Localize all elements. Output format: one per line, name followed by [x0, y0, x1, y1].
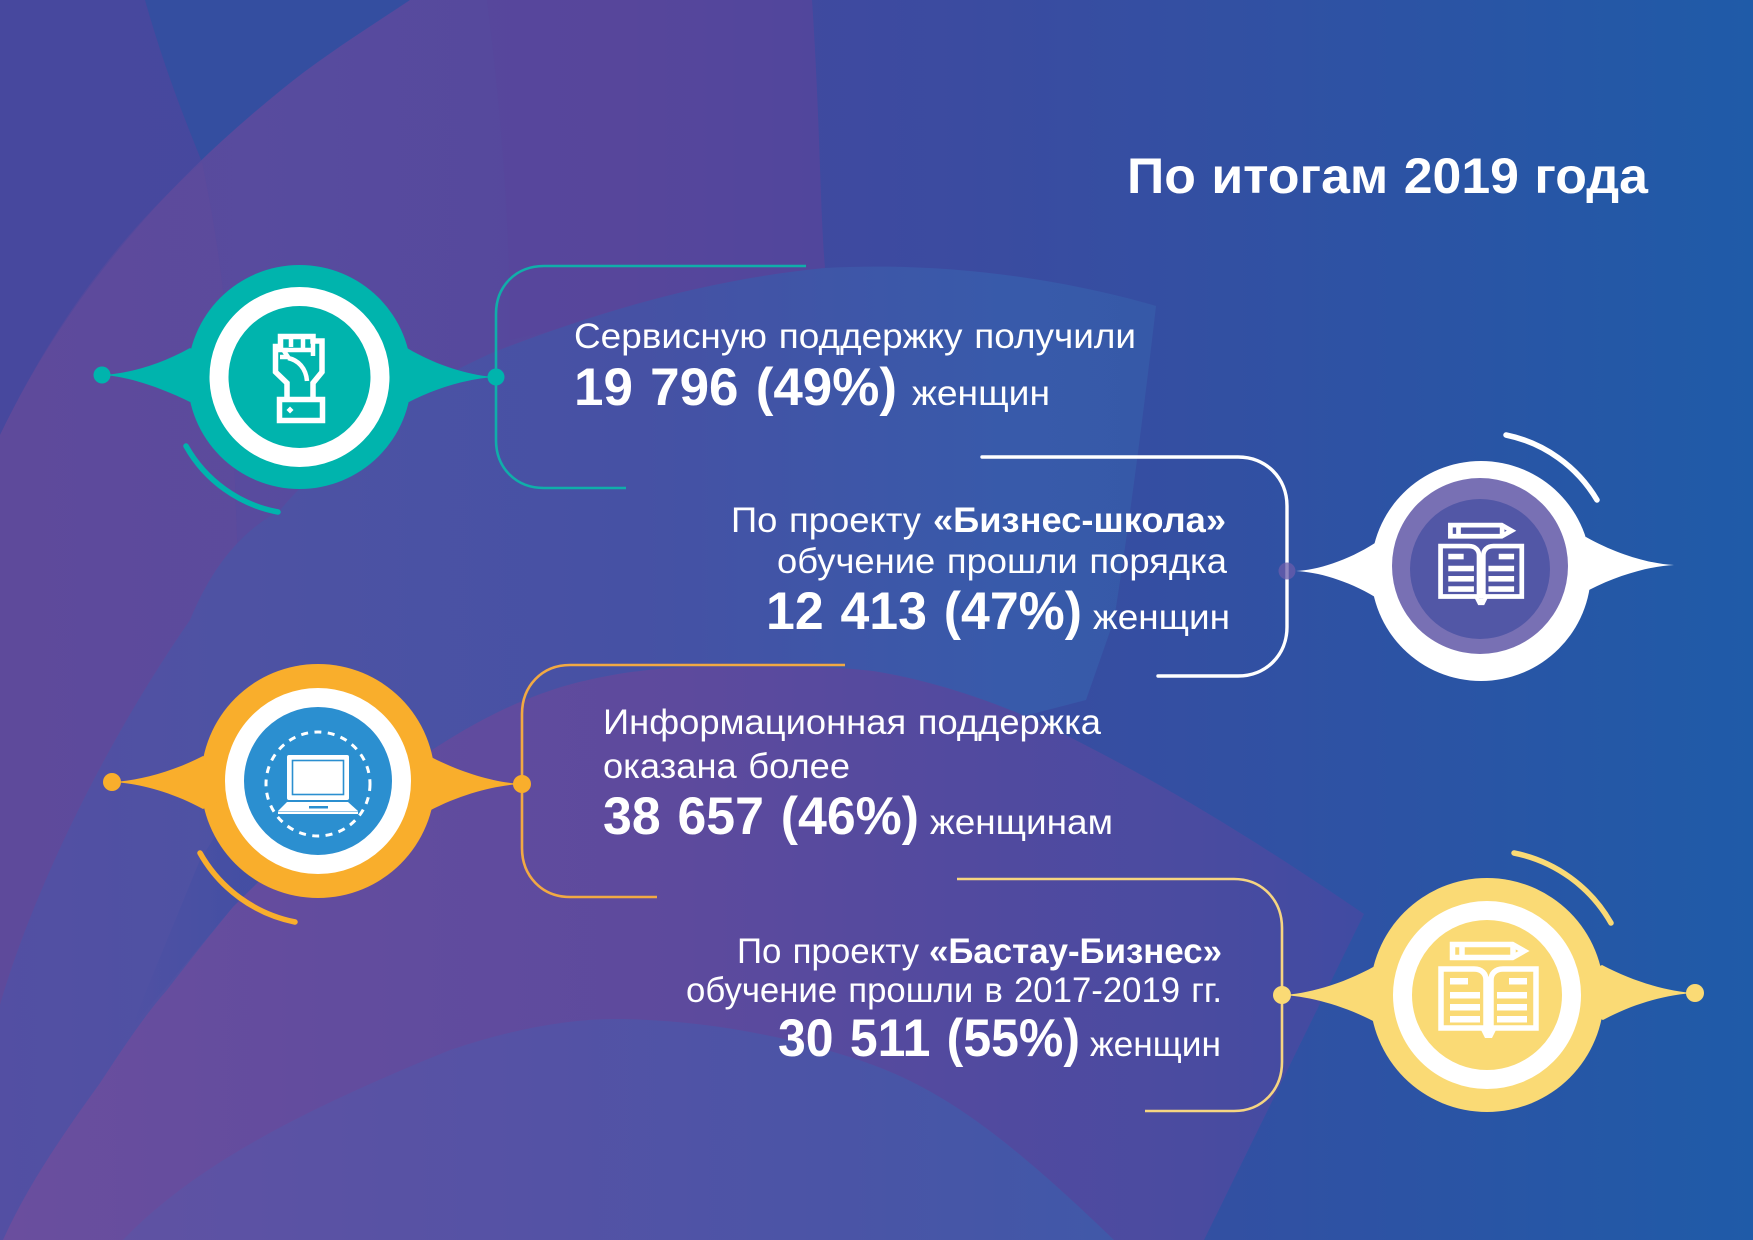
panel: service support (teal) [94, 265, 1136, 512]
text: service support: 19 796 (49%) [574, 358, 897, 417]
text: information support: женщинам [930, 803, 1113, 842]
text: business school: «Бизнес-школа» [933, 501, 1226, 540]
text: bastau business: 30 511 (55%) [778, 1009, 1080, 1068]
text: information support [603, 703, 1113, 846]
connector dot: faint [1278, 562, 1296, 580]
icon: book and pencil [1441, 944, 1536, 1038]
icon: raised fist [276, 336, 322, 420]
text: business school: женщин [1093, 598, 1230, 637]
accent arc: orange [200, 853, 295, 922]
text: bastau business [686, 932, 1222, 1068]
text: service support: Сервисную поддержку получили [574, 317, 1136, 356]
bracket: white [982, 457, 1287, 676]
bracket: orange [522, 665, 845, 897]
node: orange circle with tails [103, 664, 531, 898]
text: service support: женщин [912, 374, 1050, 413]
text: information support: 38 657 (46%) [603, 787, 919, 846]
text: business school: 12 413 (47%) [766, 582, 1082, 641]
accent arc: yellow [1514, 853, 1611, 923]
panel: information support (orange) [103, 664, 1113, 922]
text: business school: обучение прошли порядка [777, 542, 1228, 581]
bracket: teal [496, 266, 806, 488]
accent arc: white [1506, 435, 1597, 500]
icon: laptop in dashed circle [266, 732, 370, 836]
text: bastau business: По проекту [737, 932, 919, 971]
bracket: yellow [957, 879, 1282, 1111]
node: yellow circle with tails [1273, 878, 1704, 1112]
text: business school: По проекту [731, 501, 922, 540]
accent arc: teal [186, 446, 278, 512]
text: service support [574, 317, 1136, 417]
text: business school [731, 501, 1230, 641]
node: white circle with tails [1296, 461, 1674, 681]
text: information support: оказана более [603, 747, 850, 786]
title: По итогам 2019 года [1127, 148, 1649, 204]
text: bastau business: женщин [1090, 1025, 1221, 1064]
panel: bastau business (yellow) [686, 853, 1704, 1112]
panel: business school (white) [731, 435, 1674, 681]
text: information support: Информационная поддержка [603, 703, 1102, 742]
node: teal circle with tails [94, 265, 504, 489]
icon: book and pencil [1441, 525, 1522, 605]
text: bastau business: «Бастау-Бизнес» [929, 932, 1222, 971]
text: bastau business: обучение прошли в 2017-2019 гг. [686, 971, 1222, 1010]
